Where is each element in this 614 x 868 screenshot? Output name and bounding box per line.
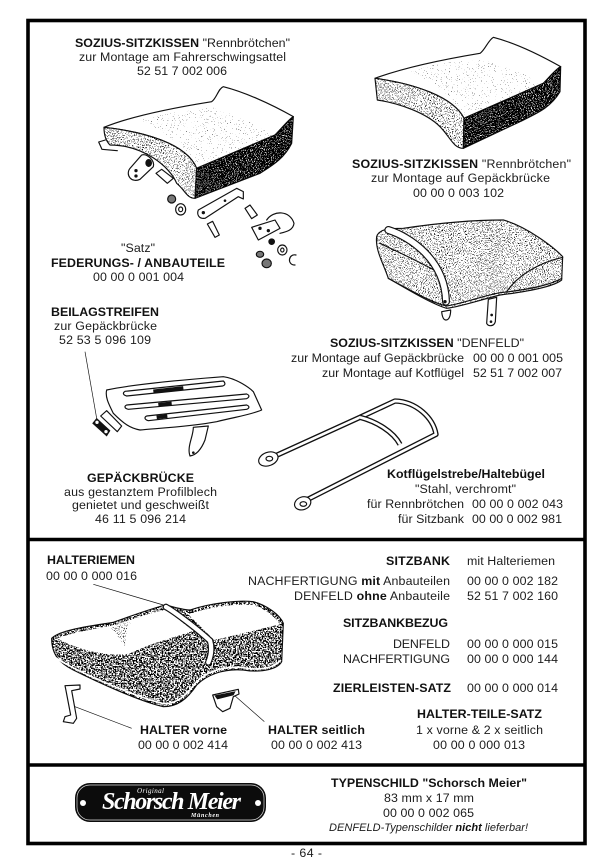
text: Gepäckbrücke: GEPÄCKBRÜCKE xyxy=(87,470,194,485)
heading: Rennbrötchen for rider swing saddle xyxy=(75,36,290,78)
panel: type plate xyxy=(75,776,528,834)
text: Rennbrötchen for luggage rack xyxy=(352,157,571,200)
price list: Sitzbankbezug: 00 00 0 000 015 xyxy=(467,637,558,651)
text: Typenschild: DENFELD-Typenschilder nicht lieferbar! xyxy=(329,822,528,834)
illustration: Rennbrötchen cushion with mounting parts xyxy=(99,87,296,268)
price list: Sitzbankbezug xyxy=(343,616,558,666)
text: Typenschild xyxy=(329,776,528,834)
label: Halter vorne: HALTER vorne xyxy=(140,723,227,737)
text: Federungs- / Anbauteile set: 00 00 0 001 004 xyxy=(93,270,184,284)
panel: bench seat xyxy=(46,553,558,752)
text: Denfeld cushion: zur Montage auf Gepäckbrücke xyxy=(291,351,464,365)
label: Halter vorne: 00 00 0 002 414 xyxy=(138,738,228,752)
text: Denfeld cushion: zur Montage auf Kotflügel xyxy=(322,366,464,380)
text: Rennbrötchen for luggage rack: zur Montage auf Gepäckbrücke xyxy=(371,171,550,185)
price list: Zierleisten-Satz xyxy=(333,681,558,695)
price list: Sitzbankbezug: SITZBANKBEZUG xyxy=(343,616,448,630)
illustration: luggage rack with spacer strip xyxy=(85,352,262,456)
price list: Zierleisten-Satz: 00 00 0 000 014 xyxy=(467,681,558,695)
text: Federungs- / Anbauteile set: FEDERUNGS- / ANBAUTEILE xyxy=(51,256,225,270)
text: Beilagstreifen: BEILAGSTREIFEN xyxy=(51,305,159,319)
text: Denfeld cushion xyxy=(291,336,563,380)
text: Halter-Teile-Satz xyxy=(416,707,543,752)
price list: Sitzbank: DENFELD ohne Anbauteile xyxy=(294,589,450,603)
page number: - 64 - xyxy=(291,846,322,860)
icon: Schorsch Meier badge: Schorsch Meier xyxy=(102,789,242,815)
text: Kotflügelstrebe / Haltebügel: für Rennbrötchen xyxy=(367,497,464,511)
text: Gepäckbrücke: aus gestanztem Profilblech xyxy=(64,485,217,499)
text: Halter-Teile-Satz: 00 00 0 000 013 xyxy=(433,738,525,752)
icon: Schorsch Meier badge: München xyxy=(190,813,220,819)
label: Halteriemen: 00 00 0 000 016 xyxy=(46,569,137,583)
label: Halter seitlich: HALTER seitlich xyxy=(268,723,365,737)
text: Kotflügelstrebe / Haltebügel: Kotflügelstrebe/Haltebügel xyxy=(387,467,545,481)
text: Denfeld cushion: SOZIUS-SITZKISSEN "DENFELD" xyxy=(330,336,524,350)
text: Rennbrötchen for luggage rack: 00 00 0 003 102 xyxy=(413,186,504,200)
text: Kotflügelstrebe / Haltebügel: 00 00 0 002 981 xyxy=(472,512,562,526)
price list: Sitzbank: NACHFERTIGUNG mit Anbauteilen xyxy=(248,574,450,588)
label: Halter vorne xyxy=(138,723,228,752)
text: Kotflügelstrebe / Haltebügel: 00 00 0 002 043 xyxy=(472,497,563,511)
panel: rear seat cushions and rack xyxy=(51,36,571,526)
illustration: fender strut / retaining bracket xyxy=(257,401,436,512)
icon: Schorsch Meier badge: Original xyxy=(137,787,164,795)
text: Gepäckbrücke: 46 11 5 096 214 xyxy=(95,512,186,526)
text: Gepäckbrücke xyxy=(64,470,217,526)
price list: Sitzbank: SITZBANK xyxy=(386,554,450,568)
illustration: Denfeld cushion with strap xyxy=(376,220,563,326)
text: Rennbrötchen for luggage rack: SOZIUS-SITZKISSEN "Rennbrötchen" xyxy=(352,157,571,171)
text: Typenschild: 83 mm x 17 mm xyxy=(384,791,474,805)
price list: Sitzbank xyxy=(248,554,558,603)
label: Halteriemen xyxy=(46,553,137,583)
text: Federungs- / Anbauteile set xyxy=(51,241,225,284)
text: Beilagstreifen: 52 53 5 096 109 xyxy=(59,333,151,347)
text: Gepäckbrücke: genietet und geschweißt xyxy=(72,498,210,512)
text: Beilagstreifen xyxy=(51,305,159,347)
price list: Zierleisten-Satz: ZIERLEISTEN-SATZ xyxy=(333,681,451,695)
illustration: Rennbrötchen cushion for luggage rack xyxy=(375,37,561,148)
heading: Rennbrötchen for rider swing saddle: zur Montage am Fahrerschwingsattel xyxy=(79,50,286,64)
label: Halter seitlich: 00 00 0 002 413 xyxy=(271,738,362,752)
text: Typenschild: TYPENSCHILD "Schorsch Meier" xyxy=(331,776,527,790)
price list: Sitzbankbezug: 00 00 0 000 144 xyxy=(467,652,558,666)
icon: Schorsch Meier badge xyxy=(75,783,266,822)
text: Denfeld cushion: 00 00 0 001 005 xyxy=(473,351,563,365)
price list: Sitzbankbezug: DENFELD xyxy=(393,637,450,651)
text: Typenschild: 00 00 0 002 065 xyxy=(383,806,474,820)
text: Beilagstreifen: zur Gepäckbrücke xyxy=(54,319,157,333)
label: Halter seitlich xyxy=(268,723,365,752)
illustration: bench seat with strap and holders xyxy=(52,584,283,728)
price list: Sitzbank: 00 00 0 002 182 xyxy=(467,574,558,588)
text: Kotflügelstrebe / Haltebügel: "Stahl, verchromt" xyxy=(415,482,516,496)
text: Halter-Teile-Satz: HALTER-TEILE-SATZ xyxy=(417,707,542,721)
text: Denfeld cushion: 52 51 7 002 007 xyxy=(473,366,562,380)
text: Federungs- / Anbauteile set: "Satz" xyxy=(121,241,155,255)
heading: Rennbrötchen for rider swing saddle: 52 51 7 002 006 xyxy=(137,64,227,78)
text: Kotflügelstrebe / Haltebügel xyxy=(367,467,563,526)
price list: Sitzbankbezug: NACHFERTIGUNG xyxy=(343,652,450,666)
price list: Sitzbank: mit Halteriemen xyxy=(467,554,555,568)
heading: Rennbrötchen for rider swing saddle: SOZIUS-SITZKISSEN "Rennbrötchen" xyxy=(75,36,290,50)
price list: Sitzbank: 52 51 7 002 160 xyxy=(467,589,558,603)
text: Kotflügelstrebe / Haltebügel: für Sitzbank xyxy=(398,512,465,526)
label: Halteriemen: HALTERIEMEN xyxy=(47,553,135,567)
text: Halter-Teile-Satz: 1 x vorne & 2 x seitlich xyxy=(416,723,543,737)
